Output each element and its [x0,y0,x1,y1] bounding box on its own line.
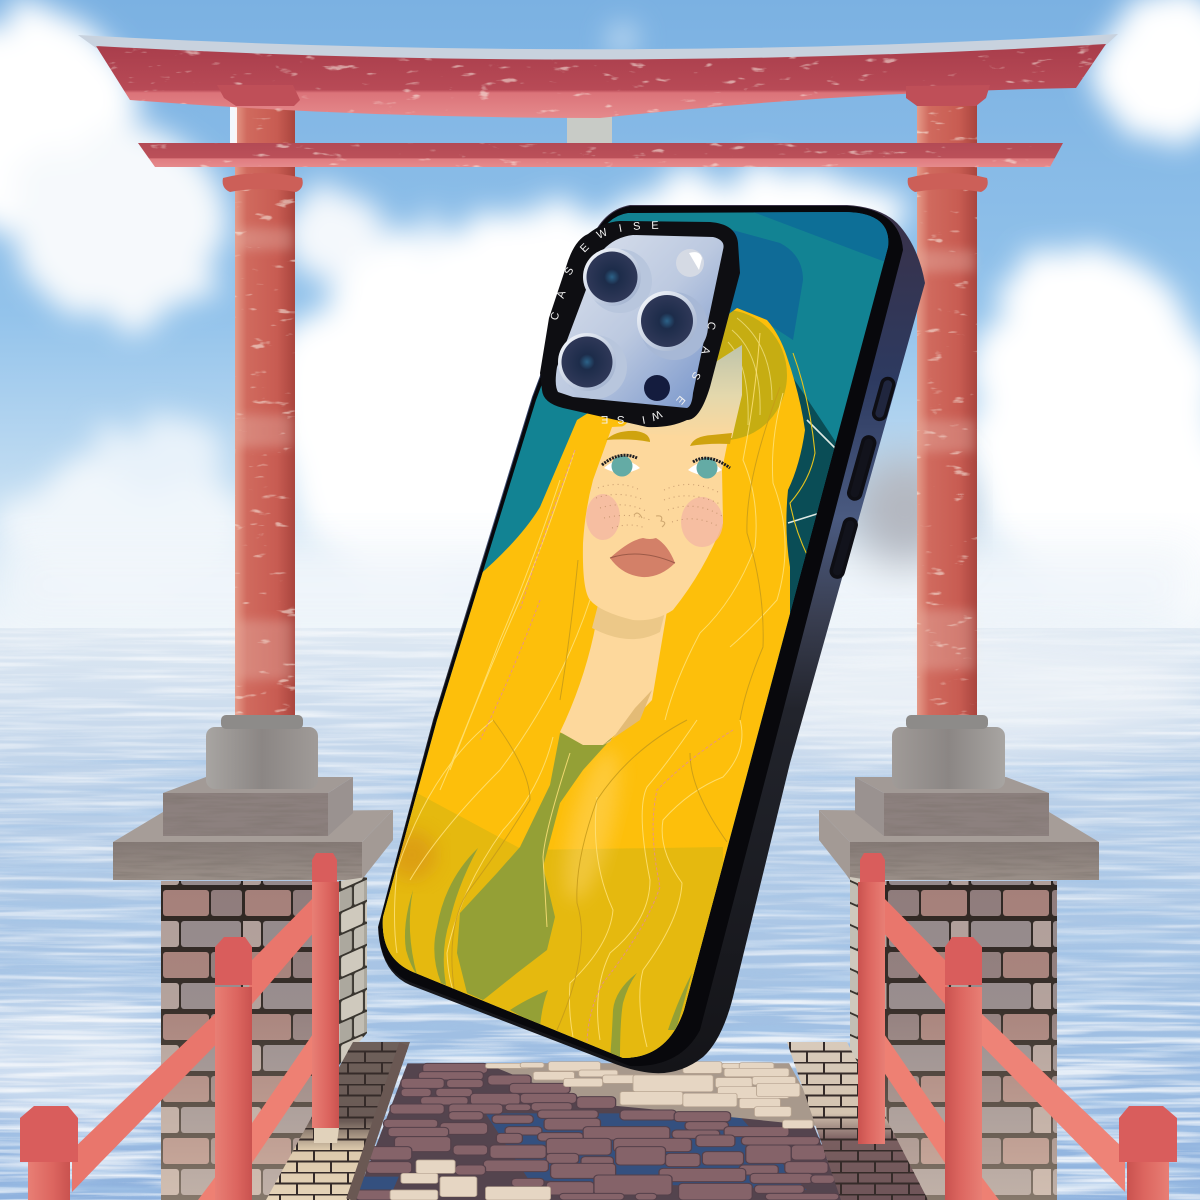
art: hair [370,308,805,1070]
art: face [583,420,732,620]
lidar sensor [644,375,670,401]
art: mountain lines [788,353,837,557]
art background: blue rounded shape [725,228,803,340]
lens: lower left [558,333,627,399]
art: lower shaded band [370,786,723,1070]
pillar caps [217,85,300,106]
right stone base [819,715,1099,1200]
front upper rail [72,997,240,1192]
art: cheeks [586,494,723,547]
left railing [20,853,339,1200]
left stone base [113,715,393,1200]
art: green dress [457,733,612,1000]
case artwork [370,200,900,1080]
art: freckles [596,484,722,528]
art: right eye [688,458,730,478]
top roof beam [78,34,1118,118]
tie beam [138,143,1063,167]
art: neck shadow [592,605,665,639]
art background: blue top corner [754,212,888,262]
rear upper rail [247,898,327,1010]
art: green hair strands [405,848,692,1060]
art: left eye [602,455,640,476]
right pillar [908,100,988,720]
background: sky [0,0,1200,630]
right curb [787,1042,928,1200]
slab front [113,810,393,880]
art: lips [610,538,675,577]
slab top [113,810,393,842]
flash [676,249,704,277]
torii gate [78,34,1118,720]
case body [378,205,925,1073]
rear post [312,853,339,1143]
art: dark teal mountain [786,378,836,612]
front post [215,937,252,1200]
brand text on bumper: CASEWISE [601,320,718,425]
clouds [0,0,1200,630]
inner bumper [379,206,903,1066]
lens: upper left [583,248,652,313]
camera bumper [540,220,740,427]
front lower rail [198,1176,232,1200]
water [0,628,1200,1200]
lens: right [637,291,708,360]
camera island [556,235,724,408]
art: nose [634,513,665,527]
art: hair speckle highlight [558,746,626,904]
rear lower rail [252,1028,330,1163]
walkway floor stones [355,1062,843,1200]
center strut [567,104,612,144]
art: neck [560,614,666,745]
brand text on bumper: CASEWISE [548,220,659,322]
art: forehead shadow [612,345,742,438]
art background: teal [370,200,900,1080]
corner post [20,1106,78,1200]
phone side buttons [830,377,895,578]
stone walkway [266,1042,928,1200]
left curb [266,1042,410,1200]
art: brows [606,431,732,446]
art: orange smudge [388,831,436,879]
art: hair strand lines [394,333,785,1047]
right railing [858,853,1177,1200]
art: camera shadow on hair [716,310,787,440]
cylinder plinth [206,727,318,789]
stepped block [163,777,353,836]
left pillar [223,100,303,720]
brand text on bumper [548,220,718,425]
phone case [370,200,925,1080]
brick wall [161,881,339,1200]
